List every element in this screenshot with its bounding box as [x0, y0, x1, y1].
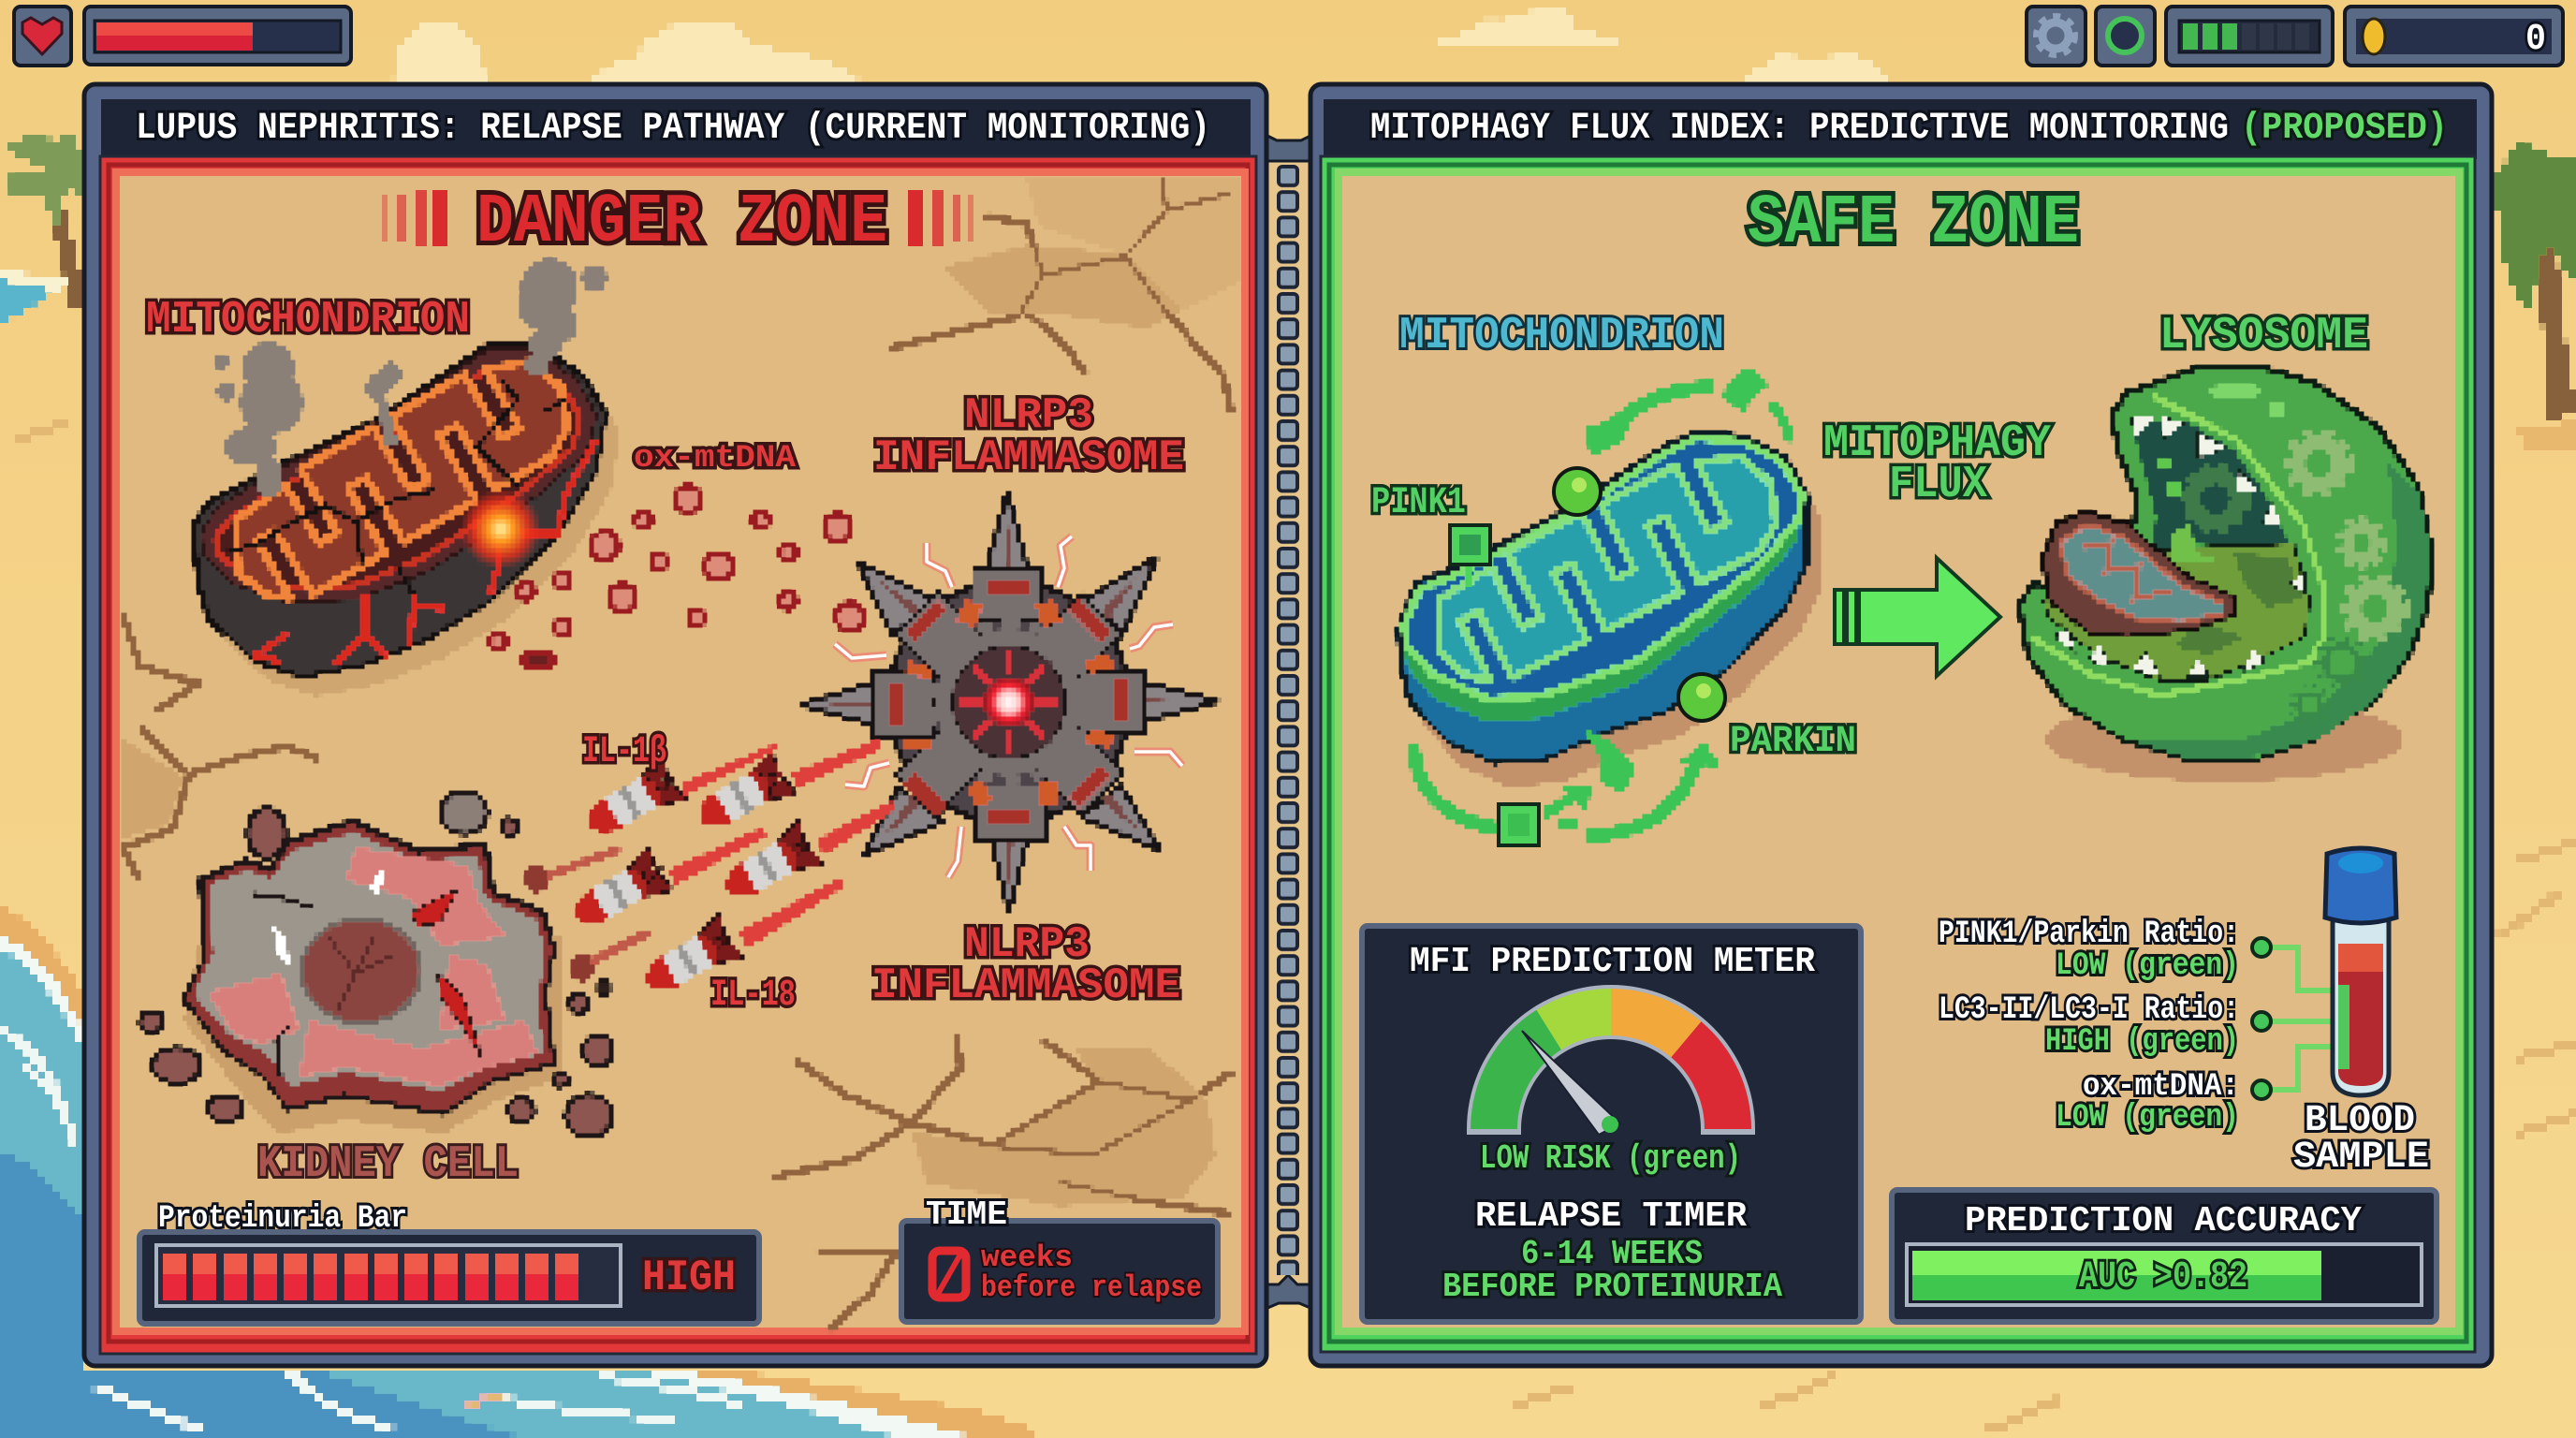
panel: prediction accuracy [1892, 1190, 2437, 1322]
small pool [0, 275, 51, 323]
icon: PINK1 marker lower [1499, 804, 1539, 845]
panel: safe zone (right) [1310, 84, 2492, 1366]
bar: AUC [1907, 1244, 2422, 1305]
icon: lysosome [2020, 367, 2432, 781]
label: mitochondrion: MITOCHONDRION [1399, 311, 1724, 361]
HUD: energy segments [2166, 7, 2333, 66]
label: mitophagy flux: FLUX [1889, 460, 1987, 510]
arrow: to lysosome [1835, 558, 2000, 676]
HUD: coin counter [2345, 7, 2563, 66]
label: NLRP3 inflammasome (bottom) [871, 920, 1180, 1010]
panel: MFI prediction meter [1362, 926, 1861, 1322]
spikes drawn in grey with dark outline [802, 494, 1217, 911]
biomarker readouts [1939, 917, 2239, 1136]
value: zero weeks: before relapse [981, 1270, 1202, 1305]
gauge [1467, 985, 1755, 1135]
label: blood sample [2293, 1100, 2429, 1179]
HUD: heart icon [14, 7, 71, 66]
value: lead time [1442, 1235, 1782, 1306]
label: parkin: PARKIN [1730, 721, 1856, 763]
panel frame [1310, 84, 2492, 1366]
label: kidney cell: KIDNEY CELL [257, 1139, 519, 1190]
bar: AUC: AUC >0.82 [2079, 1256, 2247, 1299]
heading: accuracy: PREDICTION ACCURACY [1965, 1201, 2362, 1241]
heading: danger zone: DANGER ZONE [476, 183, 887, 262]
label: proteinuria: Proteinuria Bar [158, 1201, 407, 1237]
label: NLRP3 inflammasome (bottom): INFLAMMASOME [871, 961, 1180, 1010]
panel: danger zone (left) [84, 84, 1266, 1366]
label: PINK1: PINK1 [1371, 482, 1466, 524]
label: IL-1β: IL-1β [582, 731, 666, 773]
HUD: gear button [2027, 7, 2086, 66]
icon: smoke plumes [215, 259, 607, 498]
reading: low risk: LOW RISK (green) [1480, 1139, 1741, 1178]
debris fragments [140, 792, 612, 1137]
label: ox-mtDNA: ox-mtDNA [634, 441, 797, 477]
value: lead time: BEFORE PROTEINURIA [1442, 1268, 1782, 1306]
panel frame [84, 84, 1266, 1366]
label: lysosome: LYSOSOME [2159, 311, 2368, 361]
cytokine missiles and trails [525, 740, 893, 1005]
particles: ox-mtDNA [490, 487, 863, 668]
value: zero weeks: weeks [981, 1240, 1073, 1275]
heading: safe zone: SAFE ZONE [1748, 184, 2079, 263]
label: mitophagy flux [1823, 418, 2051, 510]
header title: MITOPHAGY FLUX INDEX: PREDICTIVE MONITORING [1370, 108, 2229, 150]
time widget [901, 1196, 1218, 1322]
label: blood sample: BLOOD [2305, 1100, 2415, 1142]
connector lines [2252, 938, 2338, 1099]
biomarker readouts: LOW (green) [2056, 1100, 2239, 1136]
header title: (PROPOSED) [2241, 108, 2448, 150]
palm right [2496, 142, 2576, 449]
header title: LUPUS NEPHRITIS: RELAPSE PATHWAY (CURRENT MONITORING) [136, 108, 1210, 150]
label: mitophagy flux: MITOPHAGY [1823, 418, 2051, 469]
value: high: HIGH [642, 1254, 736, 1302]
HUD: coin counter: 0 [2525, 19, 2546, 61]
HUD: health bar [84, 7, 351, 65]
sand specks [19, 421, 2576, 1432]
biomarker readouts: ox-mtDNA: [2083, 1069, 2239, 1105]
clouds [394, 5, 1892, 86]
label: NLRP3 inflammasome (top) [873, 391, 1184, 482]
heading: relapse timer: RELAPSE TIMER [1475, 1196, 1747, 1237]
mitophagy flux loop arrows [1413, 368, 1791, 836]
icon: damaged mitochondrion [194, 336, 620, 696]
icon: PINK1 marker [1450, 525, 1490, 587]
label: blood sample: SAMPLE [2293, 1137, 2429, 1179]
palm left [5, 136, 86, 309]
label: NLRP3 inflammasome (top): NLRP3 [964, 391, 1093, 440]
icon: healthy mitochondrion [1399, 431, 1821, 786]
biomarker readouts: PINK1/Parkin Ratio: [1939, 917, 2239, 952]
value: lead time: 6-14 WEEKS [1521, 1235, 1703, 1273]
icon: damaged kidney cell [184, 822, 562, 1133]
biomarker readouts: LC3-II/LC3-I Ratio: [1939, 992, 2239, 1028]
label: time: TIME [926, 1196, 1007, 1234]
biomarker readouts: HIGH (green) [2045, 1024, 2239, 1060]
proteinuria bar widget [139, 1201, 759, 1324]
value: zero weeks [932, 1240, 1202, 1305]
label: NLRP3 inflammasome (bottom): NLRP3 [964, 920, 1090, 969]
cracked ground [122, 177, 1240, 1329]
label: IL-18: IL-18 [710, 975, 796, 1017]
icon: NLRP3 inflammasome [802, 494, 1217, 911]
biomarker readouts: LOW (green) [2056, 948, 2239, 984]
HUD: ring button [2096, 7, 2155, 66]
icon: blood sample tube [2325, 848, 2396, 1095]
chain connector between panels [1264, 135, 1314, 1309]
label: NLRP3 inflammasome (top): INFLAMMASOME [873, 433, 1184, 482]
icon: parkin balls [1554, 468, 1725, 721]
sea [0, 907, 1039, 1438]
label: mitochondrion: MITOCHONDRION [146, 295, 470, 345]
lightning sparks [835, 536, 1182, 877]
heading: meter: MFI PREDICTION METER [1410, 942, 1815, 982]
